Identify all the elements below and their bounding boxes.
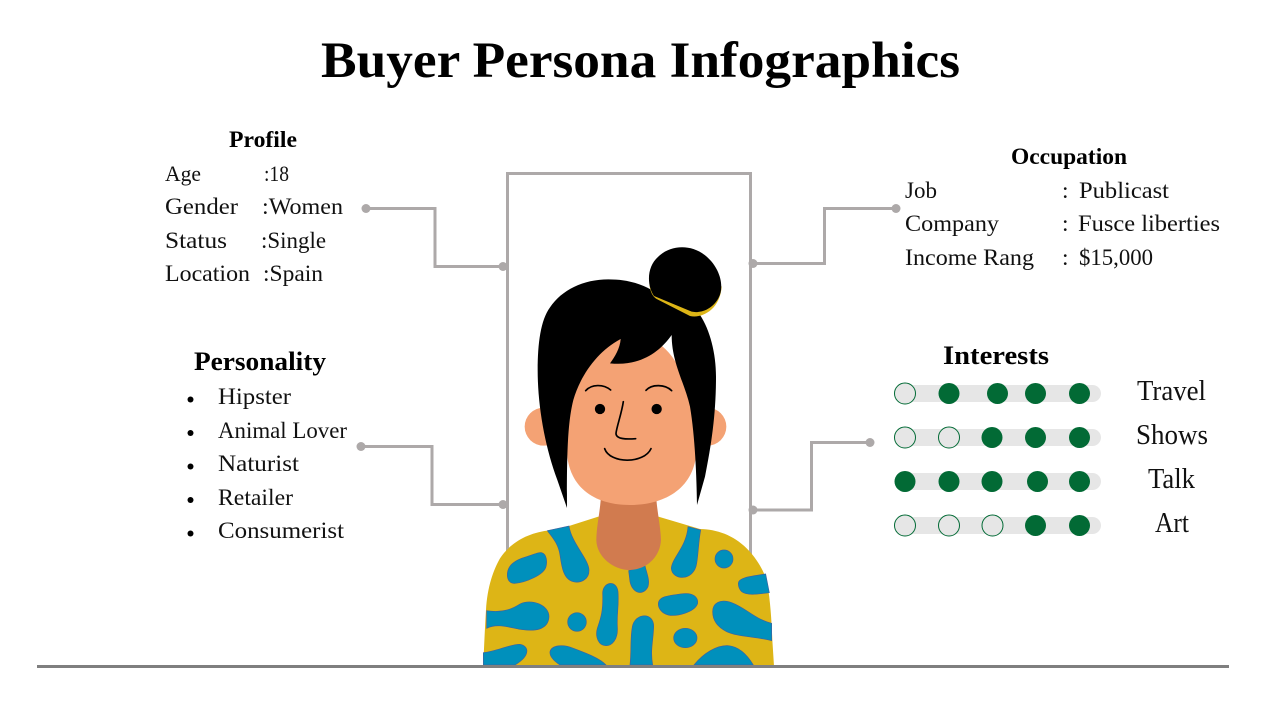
right eye [651,404,662,414]
occupation income: $15,000 [1079,245,1153,271]
occupation company: Company [905,211,999,237]
right eyebrow [646,386,672,391]
profile location: Location [165,261,250,287]
profile heading: Profile [229,127,297,152]
hair [538,279,716,508]
profile status: :Single [261,228,326,254]
interest row: travel [894,376,1206,407]
connector: profile [362,204,508,271]
profile age [165,161,289,186]
profile status: Status [165,228,227,254]
panel: interests [894,340,1208,539]
occupation company [905,211,1220,237]
interests heading: Interests [943,340,1049,370]
occupation job: Job [905,178,937,204]
profile status [165,228,326,254]
illustration: shirt [483,493,774,666]
left ear [525,408,563,446]
profile gender: Gender [165,194,238,220]
personality item: consumerist: Consumerist [218,518,344,544]
left eyebrow [586,386,611,391]
face [567,337,697,505]
profile location: :Spain [263,261,323,287]
profile age: Age [165,161,201,186]
occupation heading: Occupation [1011,144,1127,169]
portrait frame [508,174,750,574]
hair bun [649,247,721,312]
connector: occupation [748,204,900,268]
connector: interests [748,438,874,514]
occupation company: Fusce liberties [1078,211,1220,237]
personality item: retailer: Retailer [218,485,293,511]
occupation income [905,245,1153,271]
profile gender: :Women [262,194,343,220]
shirt pattern [483,526,772,665]
neck [596,493,661,570]
illustration: head [525,247,726,508]
profile age: :18 [264,161,289,186]
profile location [165,261,323,287]
personality item: naturist [188,451,299,477]
panel: personality [188,346,347,544]
personality item: animal lover: Animal Lover [218,418,347,444]
occupation income: Income Rang [905,245,1034,271]
interest row: talk [894,464,1195,495]
occupation company: : [1062,211,1069,237]
occupation job [905,178,1169,204]
mouth [605,449,651,460]
floor line [37,665,1229,668]
interest row: art: Art [1155,508,1189,539]
panel: occupation [905,144,1220,271]
interest row: shows [894,420,1208,451]
connector: personality [356,442,508,509]
personality item: hipster [188,384,291,410]
interest row: talk: Talk [1148,464,1195,495]
personality heading: Personality [194,346,326,376]
occupation job: Publicast [1079,178,1169,204]
occupation job: : [1062,178,1069,204]
interest row: art [894,508,1189,539]
interest row: travel: Travel [1137,376,1206,407]
right ear [688,408,726,446]
personality item: hipster: Hipster [218,384,291,410]
left eye [595,404,605,414]
interest row: shows: Shows [1136,420,1208,451]
title: Buyer Persona Infographics [321,33,960,89]
hair tie [649,280,722,316]
personality item: naturist: Naturist [218,451,299,477]
occupation income: : [1062,245,1069,271]
nose [616,402,636,439]
panel: profile [165,127,343,287]
profile gender [165,194,343,220]
